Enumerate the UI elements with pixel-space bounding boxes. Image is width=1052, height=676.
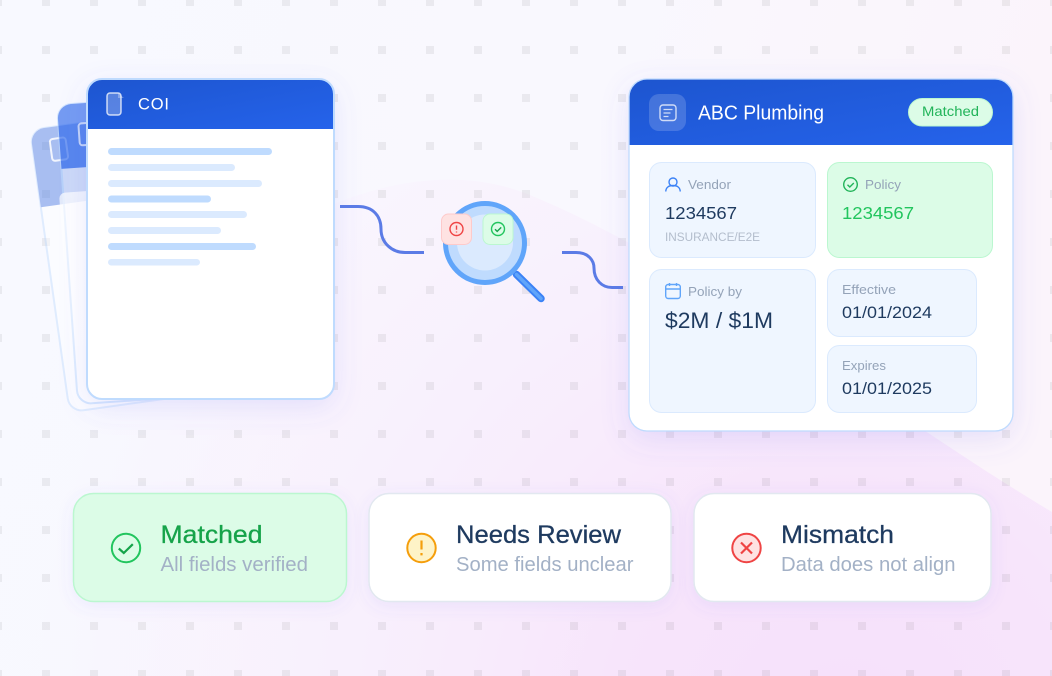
icon: check [844,178,857,191]
field: Policy by: Policy by [688,284,743,299]
legend card: Matched: All fields verified [160,554,308,576]
field: Vendor: Vendor [688,177,732,192]
field: Effective: Effective [842,282,896,297]
field: Expires [828,346,976,412]
back document: card 2 [57,89,309,404]
record title: ABC Plumbing [698,102,824,124]
badge: alert [442,214,472,244]
panel: ABC Plumbing record [629,79,1013,431]
record header [629,79,1013,145]
icon: record [649,94,686,131]
field: Vendor: INSURANCE/E2E [665,232,760,244]
COI label: COI [138,96,169,114]
field: Policy by: $2M / $1M [665,308,773,333]
field: Expires: 01/01/2025 [842,379,932,398]
legend card: Mismatch: Data does not align [781,554,956,576]
icon: warning [407,534,436,562]
icon: document [107,93,124,115]
field: Vendor: 1234567 [665,203,737,223]
connector: document to magnifier [340,206,424,252]
icon: person [666,178,680,192]
badge: check [483,214,513,244]
legend card: Needs Review: Some fields unclear [456,554,634,576]
status pill: Matched [908,98,992,126]
field: Effective [828,270,976,336]
COI header [87,79,334,129]
field: Vendor [650,162,816,258]
icon: matched check [112,534,140,562]
icon: mismatch [732,534,761,562]
legend card: Matched: Matched [160,521,262,549]
document text lines [108,148,272,266]
icon: calendar [666,283,680,298]
COI document card [87,79,334,399]
field: Expires: Expires [842,358,886,373]
back document: card 3 [30,99,288,412]
legend card: Needs Review [369,494,671,602]
field: Policy by [650,270,816,412]
legend card: Mismatch [694,494,991,602]
field: Policy: 1234567 [842,203,914,223]
back document: inner sheet [59,185,193,398]
field: Effective: 01/01/2024 [842,303,932,322]
legend card: Needs Review: Needs Review [456,521,622,549]
legend card: Matched [74,494,346,602]
field: Policy: Policy [865,177,902,192]
connector: magnifier to result [562,252,623,288]
field: Policy [828,162,992,258]
status pill: Matched: Matched [922,103,979,119]
legend card: Mismatch: Mismatch [781,521,894,549]
icon: magnifying glass [442,204,541,298]
